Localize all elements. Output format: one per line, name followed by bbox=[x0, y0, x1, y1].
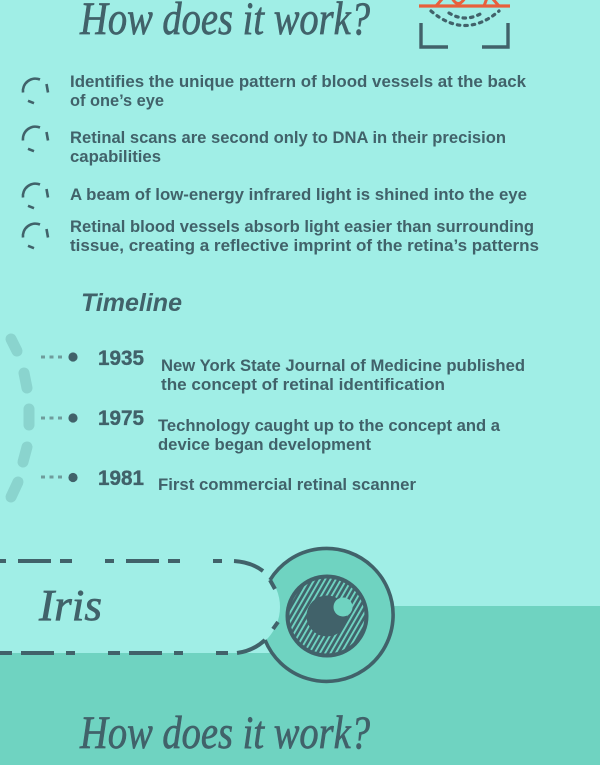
heading: how does it work bottom: How does it work? bbox=[79, 707, 370, 759]
timeline entry 1975: Technology caught up to the concept and a bbox=[158, 417, 501, 435]
icon: eye bbox=[260, 550, 394, 682]
timeline entry 1981: First commercial retinal scanner bbox=[158, 476, 417, 494]
list item 4: Retinal blood vessels absorb light easier than surrounding bbox=[70, 218, 534, 236]
list item 4 bbox=[23, 218, 539, 255]
list item 1: Identifies the unique pattern of blood vessels at the back bbox=[70, 73, 527, 91]
timeline entry 1981: 1981 bbox=[98, 467, 144, 490]
timeline entry 1935 bbox=[41, 347, 525, 394]
timeline entry 1981 bbox=[41, 467, 417, 494]
list item 3: A beam of low-energy infrared light is shined into the eye bbox=[70, 186, 527, 204]
list item 3 bbox=[23, 184, 527, 208]
lower band bbox=[0, 606, 600, 765]
iris pill label: Iris bbox=[38, 581, 102, 630]
list item 2: capabilities bbox=[70, 148, 161, 166]
list item 1 bbox=[23, 73, 527, 110]
timeline entry 1935: 1935 bbox=[98, 347, 144, 370]
heading: timeline: Timeline bbox=[81, 289, 182, 317]
timeline entry 1975: 1975 bbox=[98, 407, 144, 430]
timeline entry 1975: device began development bbox=[158, 436, 372, 454]
timeline entry 1935: New York State Journal of Medicine published bbox=[161, 357, 525, 375]
timeline entry 1935: the concept of retinal identification bbox=[161, 376, 445, 394]
timeline entry 1975 bbox=[41, 407, 501, 454]
icon: retina scanner bbox=[419, 0, 510, 47]
list item 2: Retinal scans are second only to DNA in their precision bbox=[70, 129, 506, 147]
timeline curve bbox=[11, 339, 29, 497]
list item 2 bbox=[23, 127, 506, 166]
list item 1: of one’s eye bbox=[70, 92, 164, 110]
list item 4: tissue, creating a reflective imprint of the retina’s patterns bbox=[70, 237, 539, 255]
iris pill label bbox=[0, 548, 393, 681]
